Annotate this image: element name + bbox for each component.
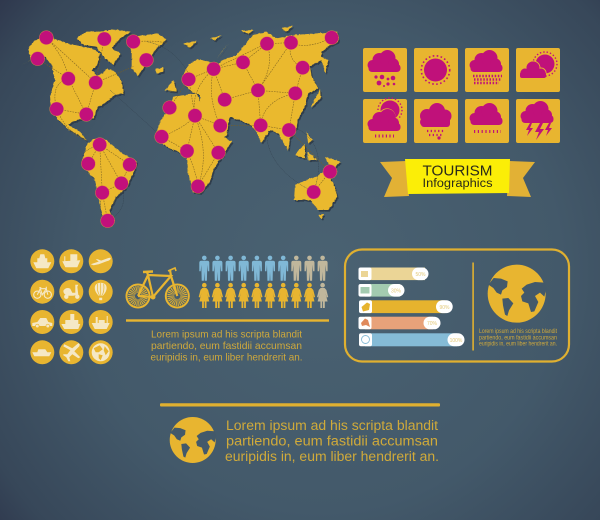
panel: bar chart and globe (345, 250, 569, 362)
bar: 50% (358, 268, 428, 280)
icon: globe (488, 265, 546, 323)
text block: people caption: Lorem ipsum ad his scripta blandit (151, 328, 302, 340)
text block: people caption: euripidis in, eum liber hendrerit an. (150, 351, 302, 363)
ribbon left tail (380, 161, 409, 197)
icon: light rain cloud (465, 99, 509, 143)
bar: 50%: 50% (415, 272, 426, 278)
text block: people caption (150, 328, 302, 363)
heading: tourism: TOURISM (422, 163, 492, 180)
bar: 70% (358, 317, 440, 329)
icon: sun (414, 48, 458, 92)
icon: airplane side view (89, 249, 113, 273)
bar: 100%: 100% (450, 338, 463, 344)
icon: sailing cargo ship (89, 310, 113, 334)
icon: bicycle small (30, 280, 54, 304)
bar: 90%: 90% (439, 305, 450, 311)
ribbon banner (380, 159, 535, 197)
icon: snow cloud (363, 48, 407, 92)
icon: ferry (59, 310, 83, 334)
transport icon grid (30, 249, 113, 364)
icon: large bicycle (126, 268, 189, 308)
icon: footer globe (170, 417, 216, 463)
icon: sun behind cloud (516, 48, 560, 92)
text block: footer caption: partiendo, eum fastidii accumsan (226, 434, 438, 448)
text block: panel caption (479, 329, 557, 348)
icon: car (30, 310, 54, 334)
bar: 70%: 70% (427, 321, 438, 327)
icon: cargo boat (59, 249, 83, 273)
text block: panel caption: euripidis in, eum liber hendrerit an. (479, 342, 557, 348)
location pins (31, 31, 339, 228)
top row of men (199, 256, 328, 281)
text block: panel caption: Lorem ipsum ad his scripta blandit (479, 329, 557, 335)
bar: 100% (359, 333, 464, 346)
icon: scooter (59, 280, 83, 304)
text block: panel caption: partiendo, eum fastidii accumsan (479, 336, 557, 342)
text block: footer caption: Lorem ipsum ad his scripta blandit (226, 418, 438, 433)
map shadow (23, 27, 342, 225)
weather icon grid (363, 48, 560, 143)
long-distance flight arcs (83, 42, 319, 221)
icon: heavy rain cloud (465, 48, 509, 92)
bottom row of women (199, 283, 328, 308)
ribbon center (405, 159, 510, 194)
icon: small globe (89, 340, 113, 364)
icon: speedboat (30, 340, 54, 364)
icon: cruise ship (30, 249, 54, 273)
text block: people caption: partiendo, eum fastidii accumsan (151, 340, 302, 352)
text block: footer caption (225, 418, 439, 464)
bar: 90% (359, 300, 453, 313)
dashed routes (38, 38, 332, 221)
bar: 30%: 30% (391, 288, 402, 294)
icon: airplane top view (59, 340, 83, 364)
icon: tall cloud with hail (414, 99, 458, 143)
pictogram: people chart (199, 256, 328, 308)
map continents (22, 26, 341, 223)
icon: sun and rain cloud (363, 98, 407, 143)
text block: footer caption: euripidis in, eum liber hendrerit an. (225, 449, 439, 464)
subheading: infographics: Infographics (422, 178, 493, 190)
icon: hot air balloon (89, 280, 113, 304)
icon: thunderstorm cloud (516, 99, 560, 143)
bar: 30% (358, 284, 404, 297)
ribbon right tail (507, 161, 535, 197)
panel frame (345, 250, 569, 362)
world map (22, 26, 342, 228)
